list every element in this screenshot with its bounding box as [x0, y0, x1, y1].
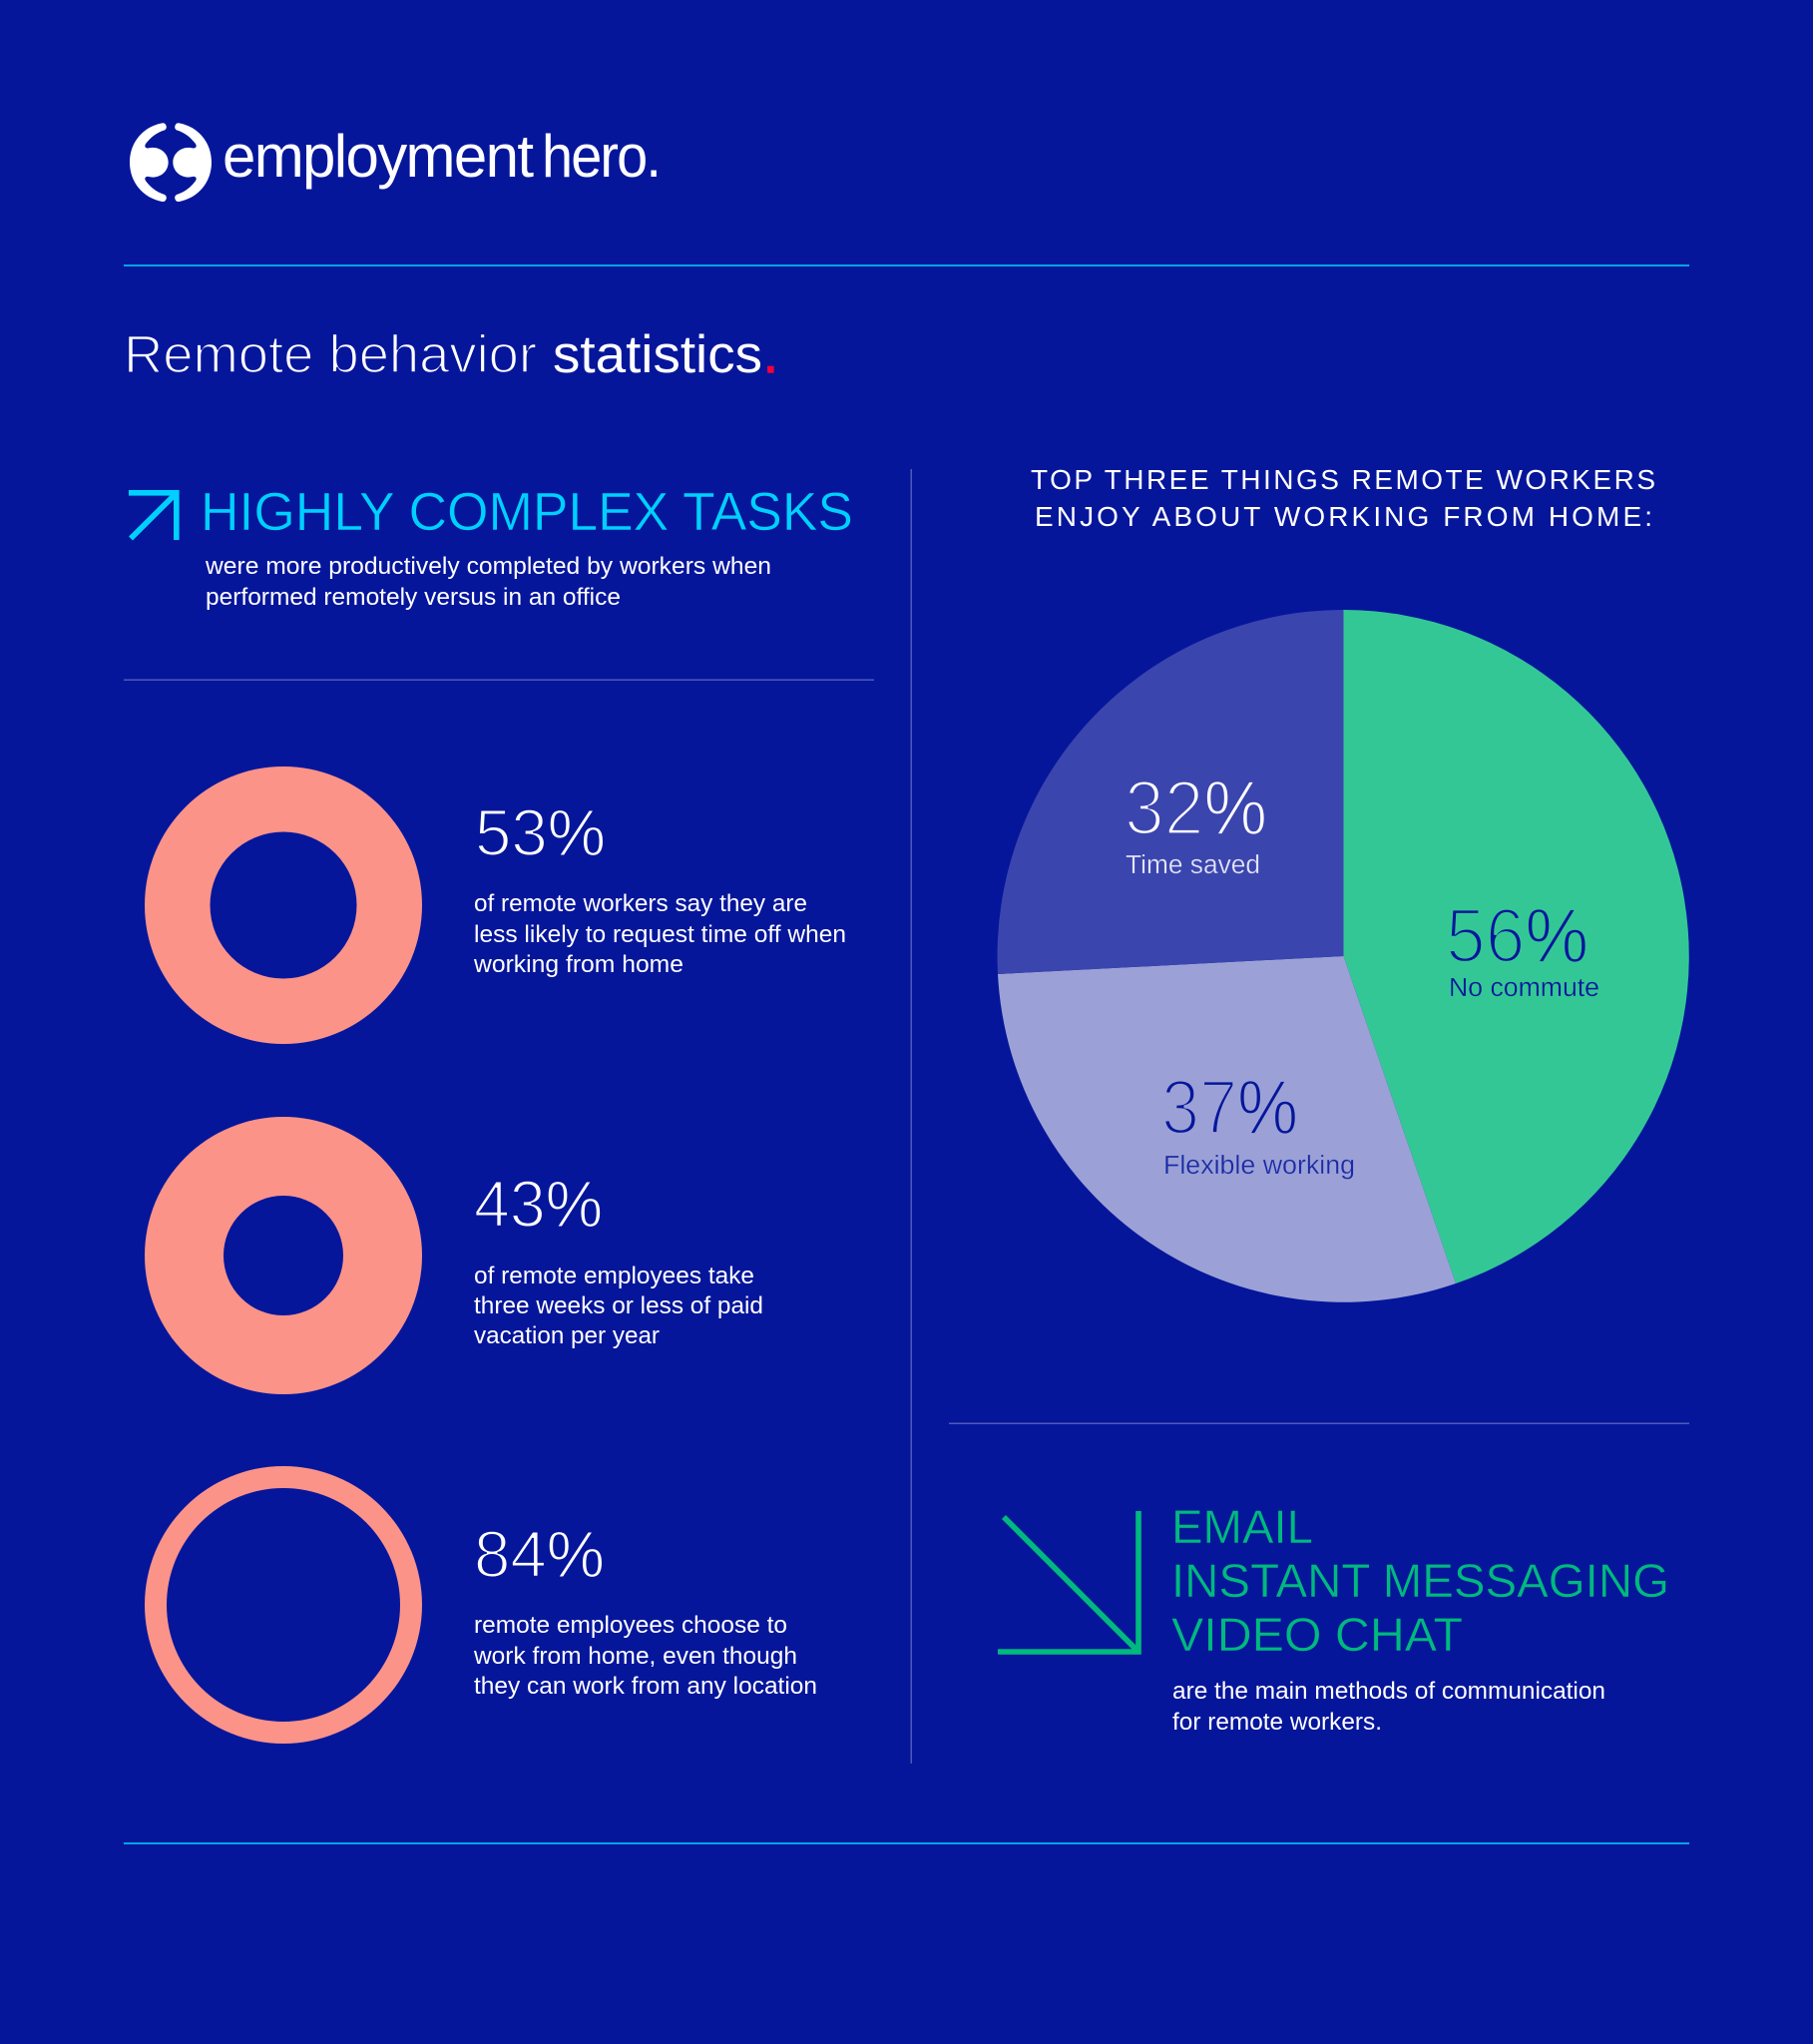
logo wordmark: hero.: [542, 123, 660, 190]
text: 43 percent description: [474, 1263, 763, 1349]
text: 84 percent description: work from home, even though: [473, 1643, 797, 1670]
text: highly complex tasks description: were more productively completed by workers when: [205, 553, 771, 580]
label: 37% flexible working: Flexible working: [1163, 1152, 1355, 1180]
text: 53 percent description: working from home: [473, 951, 683, 978]
title: .: [763, 325, 778, 384]
text: highly complex tasks description: [205, 553, 771, 611]
number: 43%: 43%: [474, 1167, 603, 1241]
text: 43 percent description: three weeks or less of paid: [474, 1292, 763, 1319]
label: 37% flexible working: [1161, 1065, 1355, 1180]
text: 53 percent description: of remote workers say they are: [474, 890, 807, 917]
heading: email instant messaging video chat: EMAIL: [1171, 1501, 1313, 1554]
logo: employment hero: [130, 123, 660, 202]
heading: email instant messaging video chat: [1171, 1501, 1669, 1662]
panel: 53 percent stat: [145, 766, 846, 1044]
heading: top three things: ENJOY ABOUT WORKING FROM HOME:: [1035, 501, 1652, 532]
heading: top three things: TOP THREE THINGS REMOTE WORKERS: [1031, 464, 1655, 495]
label: 32% time saved: 32%: [1125, 766, 1267, 851]
icon: arrow down right: [998, 1511, 1138, 1652]
label: 32% time saved: Time saved: [1126, 851, 1260, 879]
number: 53%: 53%: [475, 795, 606, 869]
panel: 43 percent stat: [145, 1117, 763, 1394]
label: 37% flexible working: 37%: [1161, 1065, 1298, 1151]
pie slice: flexible working: [998, 956, 1456, 1302]
label: 56% no commute: 56%: [1446, 893, 1588, 979]
panel: communication methods: [998, 1501, 1669, 1736]
text: 53 percent description: less likely to request time off when: [474, 921, 846, 948]
label: 56% no commute: No commute: [1449, 974, 1599, 1002]
text: communication description: [1172, 1678, 1605, 1736]
heading: email instant messaging video chat: VIDEO CHAT: [1171, 1609, 1463, 1662]
icon: arrow up right: [129, 493, 177, 540]
heading: top three things: [1031, 464, 1655, 532]
text: 43 percent description: of remote employees take: [474, 1263, 754, 1289]
text: 84 percent description: they can work from any location: [474, 1673, 817, 1700]
number: 84%: 84%: [474, 1517, 605, 1591]
panel: 84 percent stat: [145, 1466, 817, 1744]
ring chart 53 percent: [145, 766, 422, 1044]
icon: employment hero mark: [130, 123, 212, 202]
title: [124, 325, 778, 384]
heading: email instant messaging video chat: INSTANT MESSAGING: [1171, 1555, 1669, 1608]
pie chart: top three things: [998, 610, 1689, 1302]
text: communication description: for remote workers.: [1172, 1709, 1382, 1736]
ring chart 43 percent: [145, 1117, 422, 1394]
title: Remote behavior: [124, 325, 537, 384]
text: communication description: are the main methods of communication: [1172, 1678, 1605, 1705]
text: highly complex tasks description: performed remotely versus in an office: [206, 584, 621, 611]
pie slice: time saved: [998, 610, 1343, 974]
panel: highly complex tasks: [129, 482, 853, 611]
text: 84 percent description: remote employees choose to: [474, 1612, 787, 1639]
text: 43 percent description: vacation per year: [474, 1322, 660, 1349]
title: statistics: [553, 325, 762, 384]
text: 84 percent description: [473, 1612, 817, 1700]
heading: highly complex tasks: HIGHLY COMPLEX TASKS: [201, 482, 853, 542]
ring chart 84 percent: [145, 1466, 422, 1744]
text: 53 percent description: [473, 890, 846, 978]
logo wordmark: employment: [223, 123, 534, 190]
pie slice: no commute: [1343, 610, 1689, 1283]
